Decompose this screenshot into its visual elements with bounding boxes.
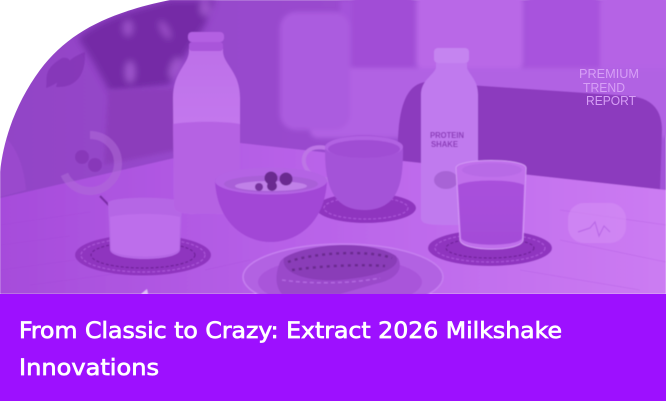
title text: Innovations [19,356,159,381]
report label [580,69,638,105]
middle coaster [316,193,416,223]
wood grain [0,210,666,290]
photo scene [0,0,666,310]
plant [78,0,215,92]
white corner curve [0,0,170,172]
bottle label text: PROTEIN [430,131,464,140]
plate [242,243,444,294]
left coaster [75,234,211,276]
milk bottle [173,32,240,214]
right coaster [428,230,552,266]
plant pot [106,89,173,164]
protein shake bottle: SHAKE [431,140,459,149]
report label: REPORT [586,94,636,108]
spoon [99,195,108,206]
bowl [215,168,327,242]
report label: TREND [583,81,625,95]
left glass [108,198,182,259]
pastry [276,245,400,294]
icon: leaves [46,52,85,88]
table [0,143,666,294]
report label: PREMIUM [579,67,639,81]
chair back left [0,135,26,197]
dark chair [398,82,662,190]
icon: flexing arms [568,203,626,243]
cup [304,135,403,210]
sofa background [280,0,666,138]
title text: From Classic to Crazy: Extract 2026 Milkshake [19,319,562,344]
right glass [456,160,526,249]
protein shake bottle [421,48,478,225]
title banner [0,294,666,401]
title text [19,319,562,381]
small marker [141,289,148,294]
icon: ring with berries [62,135,118,191]
